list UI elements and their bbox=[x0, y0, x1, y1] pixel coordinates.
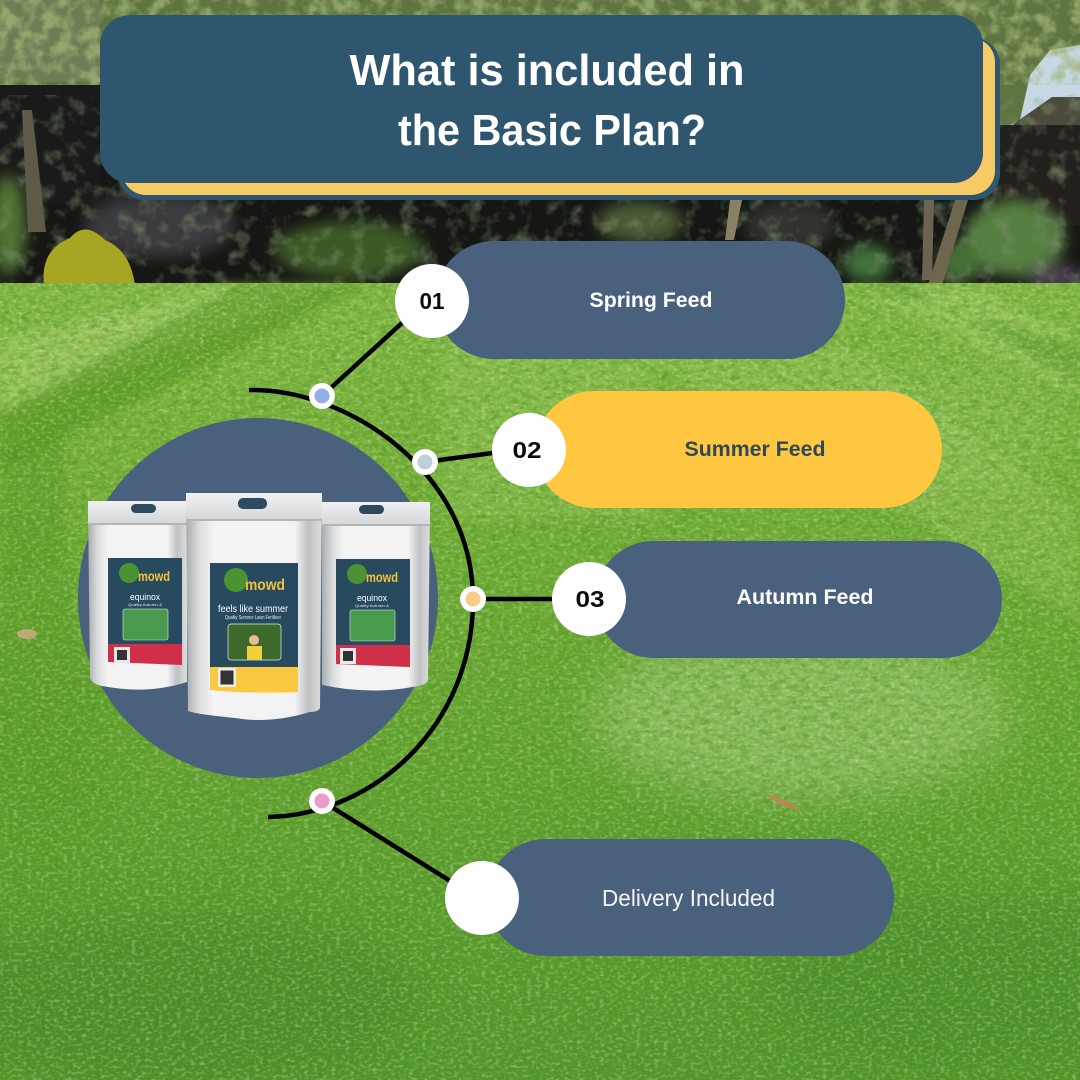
item: Spring Feed: 01 bbox=[420, 288, 445, 314]
product: right pouch: equinox bbox=[357, 593, 387, 603]
banner front panel bbox=[100, 15, 983, 183]
yellow shrub bbox=[44, 229, 135, 285]
timeline node: pink bbox=[309, 788, 335, 814]
product: right pouch: mowd bbox=[366, 569, 398, 585]
timeline node: blue bbox=[309, 383, 335, 409]
product: centre pouch: mowd bbox=[245, 577, 285, 594]
lawn bbox=[0, 283, 1080, 1080]
title text bbox=[350, 46, 744, 155]
item: Spring Feed bbox=[395, 241, 845, 359]
product: left pouch: mowd bbox=[138, 568, 170, 584]
title text: What is included in bbox=[350, 46, 744, 95]
product: right pouch bbox=[322, 502, 430, 691]
item: Delivery Included: Delivery Included bbox=[602, 885, 775, 911]
item: Summer Feed: 02 bbox=[512, 437, 542, 463]
item: Spring Feed: Spring Feed bbox=[590, 289, 712, 312]
product: right pouch: Quality Autumn & bbox=[355, 603, 389, 608]
item: Summer Feed bbox=[492, 391, 942, 508]
timeline node: grey bbox=[412, 449, 438, 475]
roof and fence bbox=[1012, 97, 1080, 125]
item: Summer Feed: Summer Feed bbox=[684, 438, 826, 461]
item: Autumn Feed bbox=[552, 541, 1002, 658]
title text: the Basic Plan? bbox=[398, 106, 706, 155]
tree trunks bbox=[22, 110, 46, 232]
item: Delivery Included bbox=[445, 839, 894, 956]
product circle bbox=[78, 418, 438, 778]
timeline node: orange bbox=[460, 586, 486, 612]
banner backing shape bbox=[118, 38, 1000, 200]
item: Autumn Feed: Autumn Feed bbox=[736, 586, 874, 609]
product: left pouch: equinox bbox=[130, 592, 160, 602]
product: centre pouch: feels like summer bbox=[218, 604, 289, 615]
item: Autumn Feed: 03 bbox=[576, 586, 604, 612]
product: centre pouch: Quality Summer Lawn Fertiliser bbox=[225, 615, 281, 621]
timeline arc and connectors bbox=[249, 323, 560, 884]
product: centre pouch bbox=[186, 493, 322, 720]
sky and foliage bbox=[0, 0, 1080, 130]
product: left pouch bbox=[88, 501, 187, 690]
title banner bbox=[100, 15, 1000, 200]
product: left pouch: Quality Autumn & bbox=[128, 602, 162, 607]
